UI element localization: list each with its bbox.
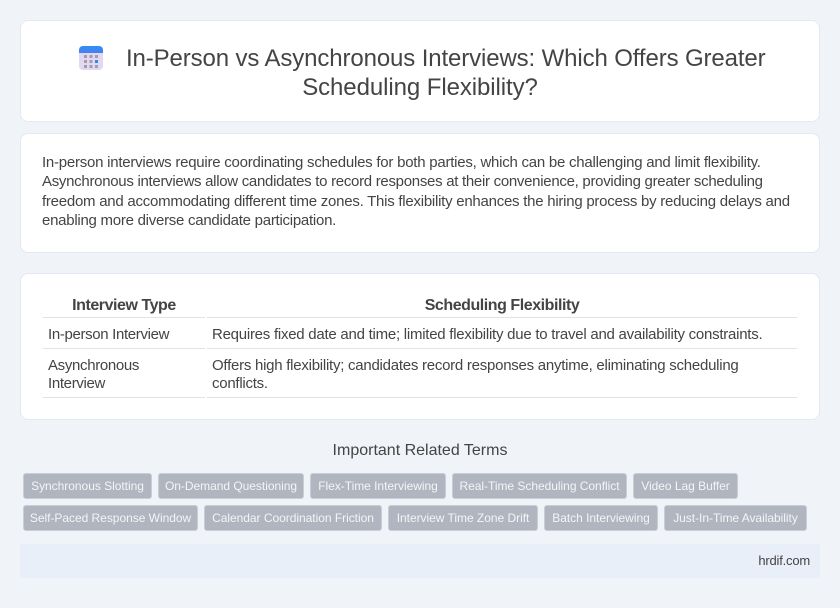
tag	[158, 473, 304, 499]
row: asynchronous flexibility: conflicts.	[212, 375, 268, 392]
summary text: Asynchronous interviews allow candidates to record responses at their convenience, providing greater scheduling	[42, 173, 763, 190]
row: asynchronous type: Asynchronous	[48, 357, 139, 374]
row: asynchronous type	[48, 357, 139, 392]
title	[126, 45, 766, 101]
summary text: enabling more diverse candidate participation.	[42, 212, 336, 229]
tag	[23, 505, 198, 531]
panel: summary	[20, 133, 820, 253]
tag	[310, 473, 446, 499]
footer text: hrdif.com	[758, 553, 810, 568]
summary text: freedom and accommodating different time zones. This flexibility enhances the hiring process by reducing delays and	[42, 193, 790, 210]
summary text	[42, 154, 790, 229]
tag: Just-In-Time Availability	[673, 511, 798, 525]
panel: header	[20, 20, 820, 122]
tag	[23, 473, 152, 499]
tag: Self-Paced Response Window	[30, 511, 191, 525]
summary text: In-person interviews require coordinating schedules for both parties, which can be challenging and limit flexibility.	[42, 154, 761, 171]
tag: Synchronous Slotting	[31, 479, 144, 493]
icon: calendar	[79, 46, 103, 70]
tag	[204, 505, 382, 531]
tag	[633, 473, 738, 499]
tag: Video Lag Buffer	[641, 479, 730, 493]
tag	[388, 505, 538, 531]
tag: On-Demand Questioning	[165, 479, 297, 493]
title: Scheduling Flexibility?	[302, 74, 538, 101]
tag: Real-Time Scheduling Conflict	[459, 479, 620, 493]
title: In-Person vs Asynchronous Interviews: Which Offers Greater	[126, 45, 766, 72]
tag: Batch Interviewing	[552, 511, 650, 525]
footer bar	[20, 544, 820, 578]
tag: Interview Time Zone Drift	[397, 511, 529, 525]
row: asynchronous type: Interview	[48, 375, 105, 392]
tag: Flex-Time Interviewing	[318, 479, 438, 493]
panel: comparison table	[20, 273, 820, 420]
row: asynchronous flexibility	[212, 357, 739, 392]
row: asynchronous flexibility: Offers high flexibility; candidates record responses anytime, eliminating scheduling	[212, 357, 739, 374]
row: in-person type: In-person Interview	[48, 326, 169, 343]
tag	[664, 505, 807, 531]
tag	[544, 505, 658, 531]
tag	[452, 473, 627, 499]
table header: scheduling flexibility: Scheduling Flexibility	[425, 297, 579, 314]
table header: interview type: Interview Type	[72, 297, 176, 314]
tags: related terms	[23, 473, 807, 531]
heading: related terms: Important Related Terms	[333, 442, 507, 459]
row: in-person flexibility: Requires fixed date and time; limited flexibility due to travel and availability constraints.	[212, 326, 762, 343]
tag: Calendar Coordination Friction	[212, 511, 374, 525]
